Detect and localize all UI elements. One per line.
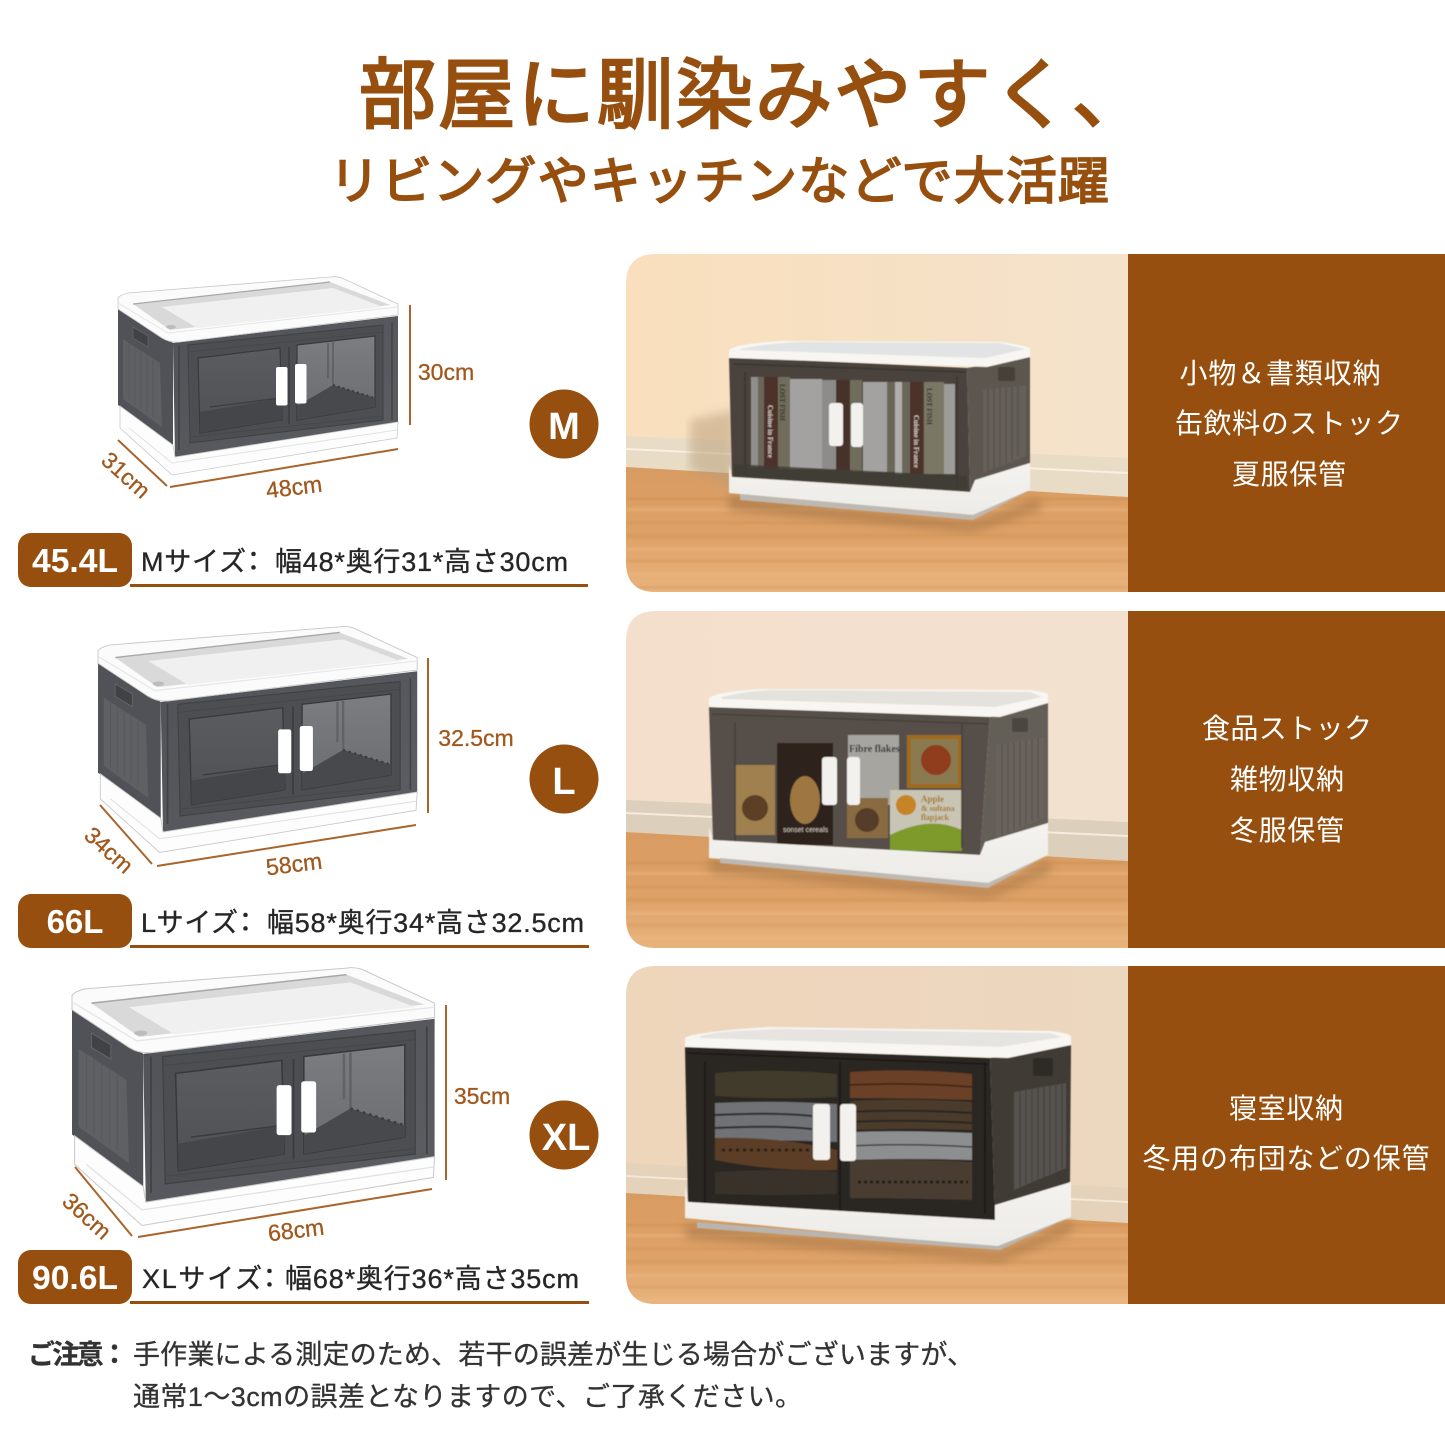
dimension lines M xyxy=(118,305,410,487)
brown block XL xyxy=(1128,966,1445,1304)
panel: use cases XL xyxy=(1128,966,1445,1304)
panel: scene L xyxy=(626,611,1128,965)
food packs: flapjack xyxy=(921,813,950,822)
title xyxy=(329,53,1149,210)
books: Cuisine in France xyxy=(766,405,774,458)
use text XL: 冬用の布団などの保管 xyxy=(1142,1143,1430,1174)
dimension labels M: 48cm xyxy=(265,471,323,503)
wall shadow xyxy=(690,410,735,490)
capacity value M: 45.4L xyxy=(32,542,118,579)
food packs xyxy=(735,735,962,851)
dimension labels M: 31cm xyxy=(96,447,156,503)
folded clothes xyxy=(715,1070,972,1200)
dimension labels M xyxy=(96,359,474,503)
baseboard xyxy=(626,1163,1128,1223)
panel: use cases L xyxy=(1128,611,1445,948)
size text L: ： xyxy=(232,908,259,938)
dimension lines L xyxy=(100,658,428,866)
dimension labels L: 34cm xyxy=(79,822,139,878)
panel: size XL dimensions xyxy=(18,968,598,1304)
storage box XL with folded clothes xyxy=(685,1027,1071,1250)
size text XL: XLサイズ xyxy=(142,1264,262,1294)
size text M xyxy=(141,547,568,577)
size badge L xyxy=(530,744,598,814)
capacity value L: 66L xyxy=(47,903,103,940)
footnote line 2: 通常1～3cmの誤差となりますので、ご了承ください。 xyxy=(133,1382,802,1412)
size letter XL: XL xyxy=(542,1117,590,1159)
food packs: Apple xyxy=(921,794,944,804)
size text M: ： xyxy=(240,547,267,577)
food packs: & sultana xyxy=(921,804,955,813)
dimension labels L xyxy=(79,725,514,880)
dimension labels L: 32.5cm xyxy=(438,725,514,751)
dimension labels XL: 68cm xyxy=(267,1214,325,1246)
size letter L: L xyxy=(552,761,576,803)
product box M xyxy=(118,277,398,475)
capacity value XL: 90.6L xyxy=(32,1259,118,1296)
books: LOST FISH xyxy=(925,388,933,425)
dimension labels XL xyxy=(57,1083,510,1246)
wall xyxy=(626,966,1128,1304)
dimension labels M: 30cm xyxy=(418,359,474,385)
books: Cuisine in France xyxy=(912,415,920,468)
panel: size M dimensions xyxy=(18,277,598,587)
footnote xyxy=(28,1339,974,1412)
books xyxy=(751,377,955,474)
use text L: 雑物収納 xyxy=(1230,764,1344,795)
use text M: 夏服保管 xyxy=(1232,459,1346,490)
size text L: 幅58*奥行34*高さ32.5cm xyxy=(267,908,584,938)
size text XL xyxy=(142,1264,579,1294)
brown block L xyxy=(1128,611,1445,948)
underline M xyxy=(130,584,588,587)
use text M xyxy=(1175,358,1403,490)
wood floor xyxy=(626,832,1128,948)
size badge XL xyxy=(530,1100,598,1170)
use text M: 小物＆書類収納 xyxy=(1180,358,1380,389)
capacity tag L xyxy=(18,894,132,948)
floor shadow xyxy=(686,1220,1072,1262)
wall xyxy=(626,611,1128,948)
size badge M xyxy=(530,390,598,458)
wall xyxy=(626,254,1128,592)
baseboard xyxy=(626,436,1128,497)
panel: use cases M xyxy=(1128,254,1445,592)
size text L: Lサイズ xyxy=(141,908,238,938)
books: LOST FISH xyxy=(778,384,786,421)
capacity tag XL xyxy=(18,1250,132,1304)
use text L: 冬服保管 xyxy=(1230,815,1344,846)
baseboard xyxy=(626,800,1128,861)
underline XL xyxy=(130,1301,589,1304)
floor shadow xyxy=(709,860,1050,898)
panel: scene XL xyxy=(626,966,1128,1327)
size text XL: ： xyxy=(256,1264,283,1294)
dimension lines XL xyxy=(75,1005,446,1237)
underline L xyxy=(130,945,589,948)
dimension labels XL: 36cm xyxy=(57,1188,117,1244)
footnote line 1: 手作業による測定のため、若干の誤差が生じる場合がございますが、 xyxy=(133,1340,974,1370)
use text M: 缶飲料のストック xyxy=(1175,408,1403,439)
storage box M with books xyxy=(729,341,1030,520)
storage box L with food packs xyxy=(709,689,1048,888)
capacity tag M xyxy=(18,533,132,587)
size letter M: M xyxy=(548,406,580,448)
title line 1: 部屋に馴染みやすく、 xyxy=(359,53,1149,139)
footnote label: ご注意： xyxy=(28,1339,128,1370)
size text M: 幅48*奥行31*高さ30cm xyxy=(275,547,568,577)
use text L xyxy=(1202,713,1372,846)
use text XL: 寝室収納 xyxy=(1229,1093,1343,1124)
food packs: sonset cereals xyxy=(783,827,829,834)
use text XL xyxy=(1142,1093,1430,1174)
floor shadow xyxy=(729,495,1040,532)
dimension labels XL: 35cm xyxy=(454,1083,510,1109)
product box XL xyxy=(72,968,435,1226)
wood floor xyxy=(626,1193,1128,1304)
brown block M xyxy=(1128,254,1445,592)
use text L: 食品ストック xyxy=(1202,713,1372,744)
title line 2: リビングやキッチンなどで大活躍 xyxy=(329,153,1109,210)
panel: scene M xyxy=(626,254,1128,601)
wood floor xyxy=(626,467,1128,592)
size text XL: 幅68*奥行36*高さ35cm xyxy=(285,1264,579,1294)
panel: size L dimensions xyxy=(18,626,598,948)
product box L xyxy=(98,626,417,852)
size text M: Mサイズ xyxy=(141,547,246,577)
dimension labels L: 58cm xyxy=(265,848,323,880)
food packs: Fibre flakes xyxy=(849,744,900,755)
